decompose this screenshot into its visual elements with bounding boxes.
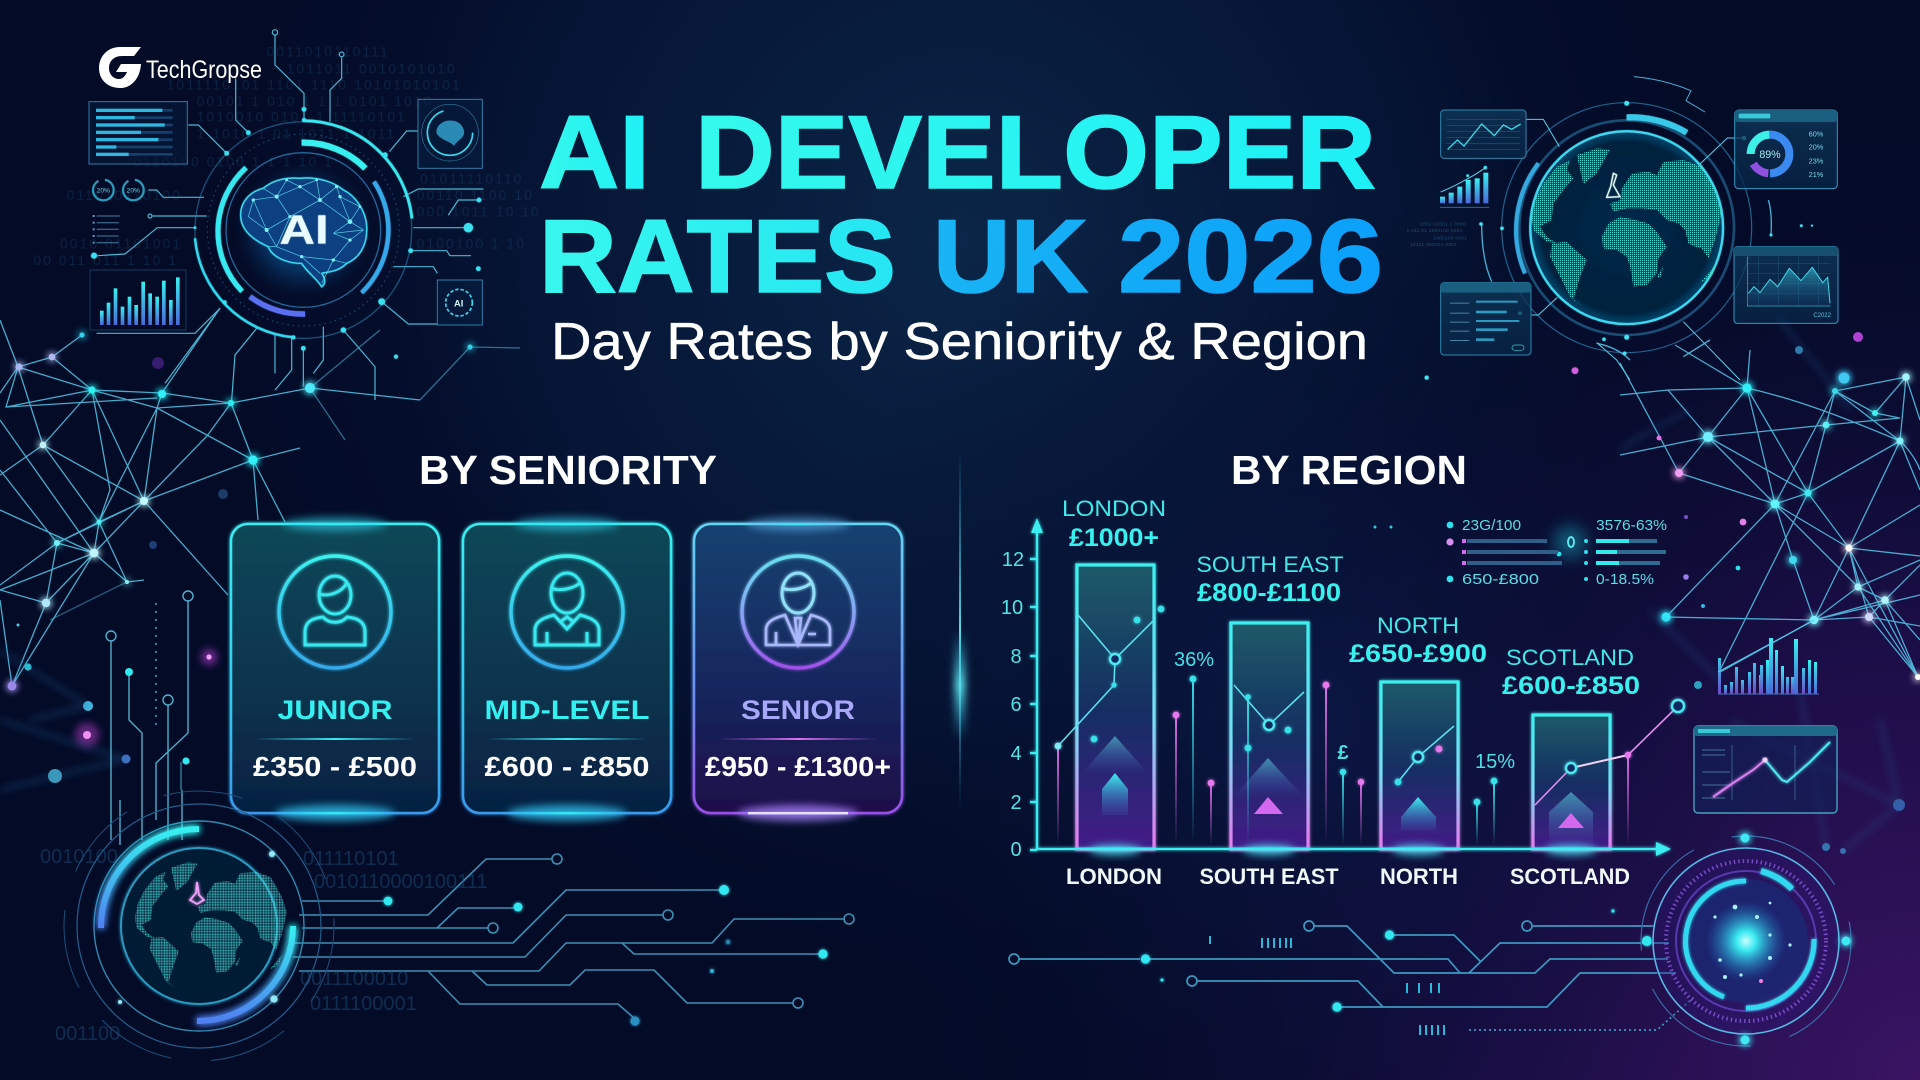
binary text: 011110101: [303, 848, 399, 870]
x axis labels: LONDON: [1066, 864, 1162, 889]
circuit board: left globe: [40, 846, 854, 1045]
connector nodes: [91, 107, 481, 359]
binary background: 00110 1100 10: [417, 187, 534, 203]
binary background: 011010110100: [67, 187, 182, 203]
logo wordmark: TechGropse: [146, 56, 262, 84]
orb nodes: [1740, 834, 1850, 1044]
x axis labels: NORTH: [1380, 864, 1458, 889]
value label: scotland: SCOTLAND: [1506, 645, 1634, 670]
mini bar chart: [90, 270, 186, 330]
bullet list: [93, 215, 120, 244]
base glows: [1089, 845, 1597, 855]
lollipop heads: [1055, 606, 1631, 805]
circuit board: right: [1009, 909, 1694, 1035]
neural network: left: [0, 308, 520, 686]
panel: data rows: [1441, 283, 1531, 355]
chart annotations: [1174, 649, 1515, 773]
value label: south east: [1196, 552, 1344, 607]
binary background: 1010010 0101 1 11110101: [197, 109, 407, 125]
binary background: 00 011 011 1 10 1: [33, 252, 178, 268]
traces: [293, 854, 854, 1018]
gauges: 20%: [127, 187, 140, 194]
binary background: 01011110110: [420, 170, 523, 186]
bar: south east: [1231, 623, 1308, 849]
x axis labels: SOUTH EAST: [1200, 864, 1339, 889]
title line 1: AI: [539, 95, 650, 211]
panel: donut: 21%: [1809, 170, 1824, 179]
hub rings: [195, 121, 412, 338]
value label: north: £650-£900: [1349, 640, 1487, 668]
binary background: [33, 44, 541, 268]
glow dots: right: [1620, 320, 1905, 854]
binary background: 1011011 0010101010: [287, 60, 457, 76]
panel: area chart: C2022: [1813, 313, 1832, 319]
value label: london: £1000+: [1069, 524, 1159, 552]
panel: brain icon: [418, 99, 482, 168]
faint data text: 1 011 01 1000100 0001: [1407, 228, 1463, 233]
panel: donut: 89%: [1759, 149, 1781, 161]
AI hub illustration: [33, 30, 541, 400]
binary background: 0110100 0100 1 1 1 10 1: [133, 154, 334, 170]
glow dots: left: [0, 357, 228, 790]
globe: bottom left: [64, 791, 334, 1061]
globe rings: [1482, 77, 1771, 360]
connector lines: [97, 30, 483, 400]
panel: junior card: [231, 517, 439, 821]
price: mid-level: £600 - £850: [484, 751, 650, 782]
earth: [121, 848, 287, 1004]
subtitle: Day Rates by Seniority & Region: [551, 313, 1368, 371]
brand logo: [99, 47, 262, 88]
traces: [1009, 921, 1694, 1030]
panel: donut: 20%: [1809, 142, 1824, 151]
binary text: 0011100010: [300, 968, 408, 990]
y axis labels: 12: [1002, 549, 1024, 571]
gauges: 20%: [97, 187, 110, 194]
binary background: 0011010110111: [267, 44, 390, 60]
value label: london: [1062, 496, 1166, 552]
value label: scotland: £600-£850: [1502, 672, 1640, 700]
inner stems: [1247, 697, 1249, 845]
title line 1: DEVELOPER: [695, 95, 1376, 211]
legend data widget: 650-£800: [1462, 571, 1539, 588]
binary background: 1 1010 1 01 1011 1 1011: [197, 125, 396, 141]
x axis labels: SCOTLAND: [1510, 864, 1630, 889]
heading: by region: BY REGION: [1231, 447, 1467, 493]
panel: senior card: [694, 517, 902, 821]
faint data text: 10101 000101 0001: [1410, 242, 1457, 247]
hub label: AI: [279, 206, 329, 252]
bar: north: [1381, 682, 1458, 849]
faint data text: [1407, 221, 1467, 247]
chart annotations: 36%: [1174, 649, 1214, 671]
y axis labels: 4: [1010, 743, 1022, 765]
panel: trend dashboard: [1694, 726, 1837, 813]
chart annotations: 15%: [1475, 751, 1515, 773]
binary text: 0010110000100111: [314, 871, 488, 893]
small bar chart: [1718, 620, 1819, 694]
panel: bars list: [89, 102, 187, 164]
value label: scotland: [1502, 645, 1640, 700]
value label: north: NORTH: [1377, 613, 1459, 638]
value label: london: LONDON: [1062, 496, 1166, 521]
binary background: 000 1011 10 10: [417, 204, 541, 220]
circuit traces: left vertical: [106, 591, 193, 845]
y axis labels: [1001, 549, 1024, 861]
label: mid-level: MID-LEVEL: [484, 695, 650, 725]
icon: senior person: [742, 556, 854, 668]
binary text: 0010100: [40, 846, 118, 868]
panel: donut: 23%: [1809, 156, 1824, 165]
title line 2: UK: [933, 199, 1088, 315]
growth bars: [1440, 173, 1489, 207]
neural network: right: [1620, 345, 1920, 677]
bar: scotland: [1533, 715, 1610, 849]
value label: south east: SOUTH EAST: [1196, 552, 1344, 577]
icon: junior person: [279, 556, 391, 668]
price: junior: £350 - £500: [253, 751, 417, 782]
vertical divider: [955, 450, 965, 810]
binary background: 0100100 1 10: [417, 235, 526, 251]
faint data text: 1000100 0001: [1433, 235, 1467, 240]
tick marks: [1210, 936, 1444, 1035]
hud rings: [64, 791, 334, 1061]
value label: north: [1349, 613, 1487, 668]
binary text: [40, 846, 488, 1045]
binary background: 0010 01101001: [60, 235, 182, 251]
trend lines: [1058, 615, 1678, 805]
region bar chart: [1001, 496, 1684, 889]
bar: london: [1077, 565, 1154, 849]
icon: mid-level person: [511, 556, 623, 668]
price: senior: £950 - £1300+: [705, 751, 891, 782]
gauges: [93, 180, 144, 200]
trace nodes: [384, 885, 828, 1026]
label: junior: JUNIOR: [278, 695, 392, 725]
y axis labels: 10: [1001, 597, 1023, 619]
y axis labels: 2: [1010, 792, 1022, 814]
x axis labels: [1066, 864, 1630, 889]
ring markers: [1110, 654, 1684, 773]
panel: line chart: [1441, 110, 1526, 158]
y axis labels: 0: [1010, 839, 1022, 861]
title line 2: [539, 199, 1383, 315]
binary text: 001100: [55, 1023, 120, 1045]
binary background: 1011110101 1101 1110 10101010101: [167, 76, 462, 92]
y axis labels: 6: [1010, 694, 1022, 716]
network nodes: left: [8, 332, 473, 690]
globe dashboard illustration: [1407, 77, 1838, 380]
value label: south east: £800-£1100: [1197, 579, 1341, 607]
trace nodes: [1141, 909, 1652, 1012]
legend data widget: [1374, 517, 1667, 588]
binary text: 0111100001: [310, 993, 417, 1015]
chart axes: [1030, 518, 1671, 856]
y axis labels: 8: [1010, 646, 1022, 668]
panel: AI chip: AI: [454, 298, 463, 308]
faint data text: 1001 01001 1 0000: [1420, 221, 1466, 226]
legend data widget: 0-18.5%: [1596, 571, 1654, 588]
title line 2: RATES: [539, 199, 896, 315]
panel: area chart: [1734, 247, 1838, 323]
panel: donut: 60%: [1809, 130, 1824, 139]
glow nodes: [1425, 101, 1813, 380]
icon: logo mark: [99, 47, 141, 88]
connector lines: [1441, 119, 1744, 380]
panel: AI chip: [437, 280, 482, 325]
binary background: 00101 1 010 1 1 1 0101 1010: [197, 93, 433, 109]
legend data widget: 23G/100: [1462, 517, 1521, 534]
chart annotations: £: [1337, 742, 1349, 764]
label: senior: SENIOR: [741, 695, 855, 725]
network nodes: right: [1661, 372, 1920, 680]
hud orb: bottom right: [1641, 834, 1851, 1046]
orb rings: [1641, 836, 1851, 1046]
lollipop stems: [1057, 620, 1629, 846]
legend data widget: 3576-63%: [1596, 517, 1667, 534]
heading: by seniority: BY SENIORITY: [419, 447, 717, 493]
panel: mid-level card: [463, 517, 671, 821]
panel: donut: [1735, 110, 1837, 189]
brain: [241, 178, 367, 287]
title line 2: 2026: [1118, 199, 1383, 315]
globe: [1530, 131, 1723, 324]
